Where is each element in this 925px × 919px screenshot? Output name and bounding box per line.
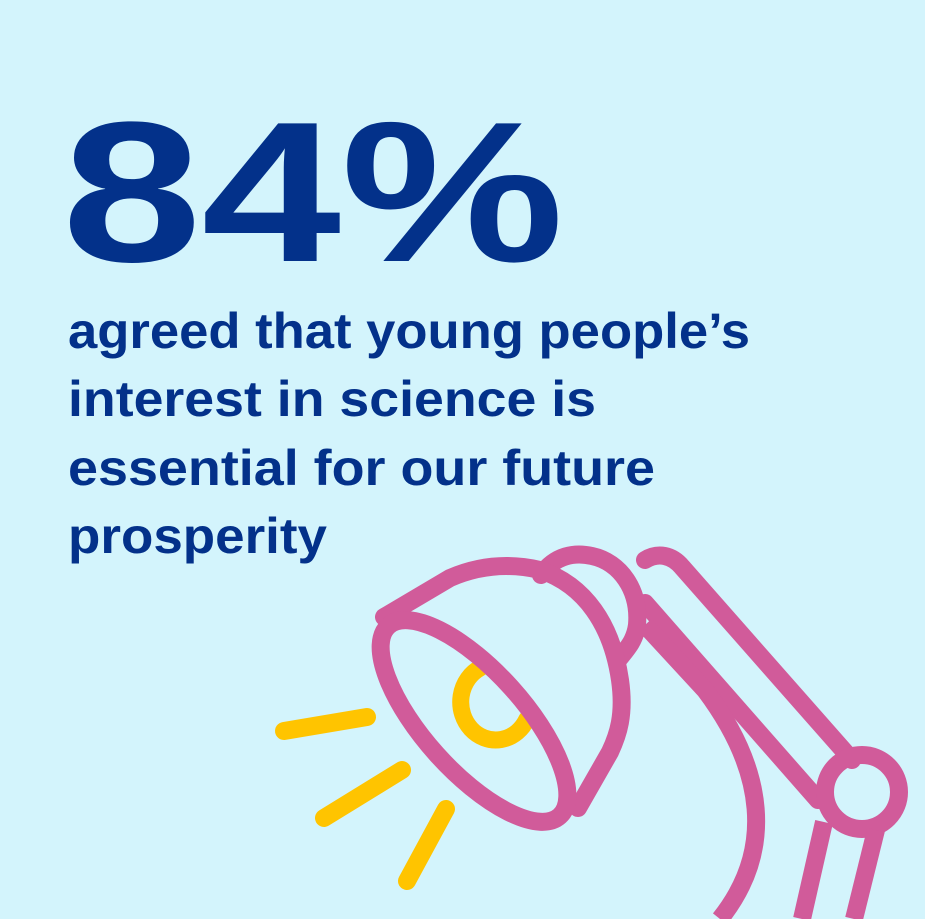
statement text: interest in science is [68,371,596,427]
statement text: prosperity [68,508,327,564]
headline stat: 84% [62,81,564,304]
icon: desk lamp [284,554,899,919]
shade opening [351,592,597,850]
statement text [68,303,750,564]
light rays [284,717,446,881]
knob [541,554,637,660]
statement text: agreed that young people’s [68,303,750,359]
joint [825,755,899,829]
shade [384,566,622,808]
legs [802,822,824,919]
lamp cord [645,625,756,919]
lamp arm [645,556,852,760]
statement text: essential for our future [68,440,655,496]
bulb [461,668,527,740]
